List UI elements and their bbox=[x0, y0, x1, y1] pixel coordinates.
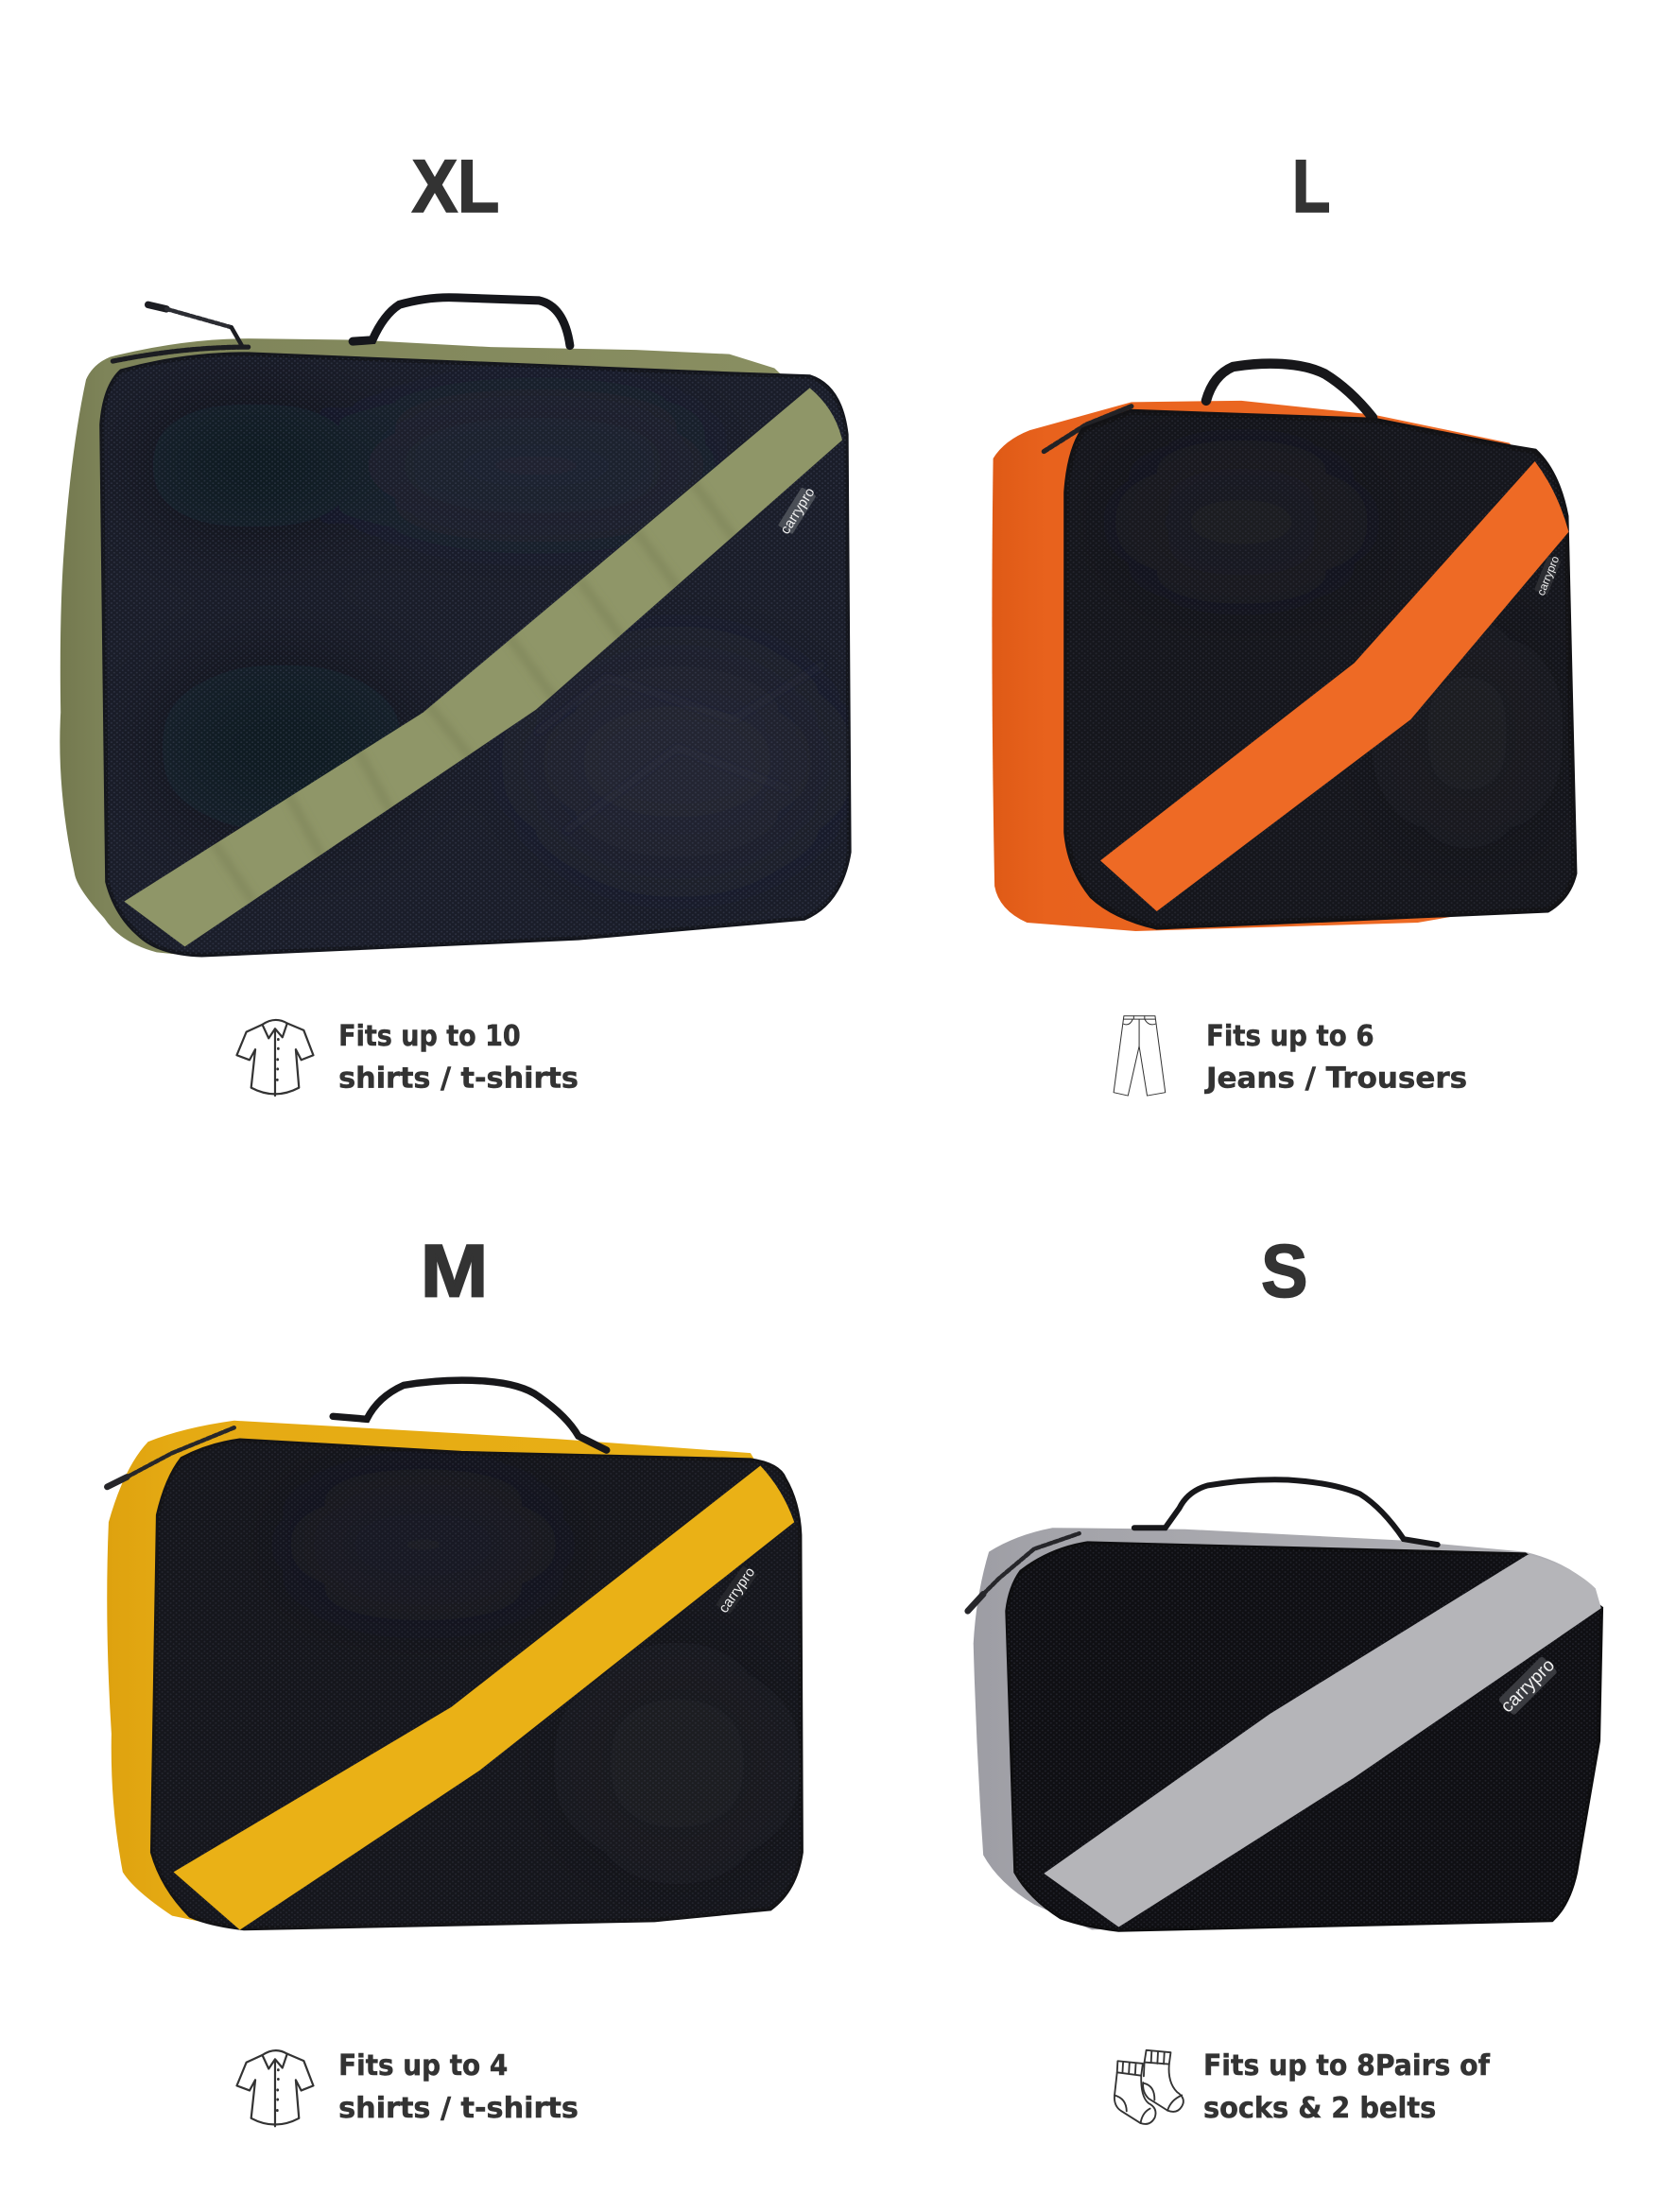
icon: socks bbox=[1115, 2050, 1184, 2124]
icon: shirt bbox=[237, 1020, 313, 1096]
text line 2: socks & 2 belts bbox=[1203, 2092, 1436, 2125]
mesh texture bbox=[1066, 412, 1574, 926]
zipper bbox=[1044, 406, 1132, 452]
zipper pull bbox=[112, 304, 249, 361]
brand tag: carrypro bbox=[777, 485, 818, 537]
olive bag body bbox=[60, 338, 832, 957]
brand tag: carrypro bbox=[716, 1564, 758, 1616]
bag: XL olive bbox=[60, 298, 849, 957]
capacity: L bbox=[1114, 1016, 1467, 1096]
mesh texture bbox=[152, 1441, 802, 1928]
text line 2: Jeans / Trousers bbox=[1204, 1063, 1467, 1096]
text line 1: Fits up to 6 bbox=[1206, 1020, 1374, 1053]
capacity: M bbox=[237, 2049, 579, 2126]
text line 1: Fits up to 8Pairs of bbox=[1203, 2049, 1491, 2082]
text line 1: Fits up to 4 bbox=[338, 2049, 508, 2082]
grey bag body bbox=[974, 1528, 1599, 1930]
mesh panel bbox=[1066, 412, 1574, 926]
zipper pull bbox=[107, 1427, 234, 1487]
band pleats bbox=[212, 479, 748, 903]
text line 1: Fits up to 10 bbox=[338, 1020, 521, 1053]
mesh panel bbox=[101, 354, 849, 955]
handle bbox=[333, 1380, 607, 1450]
heading: M: M bbox=[421, 1228, 488, 1312]
mesh panel bbox=[152, 1441, 802, 1928]
bag: S grey bbox=[968, 1479, 1601, 1930]
diagonal band bbox=[1100, 461, 1568, 911]
mesh panel bbox=[1008, 1544, 1601, 1930]
mesh shading bbox=[296, 1495, 776, 1862]
bag: L orange bbox=[992, 364, 1574, 931]
handle bbox=[1206, 364, 1373, 418]
icon: jeans bbox=[1114, 1016, 1166, 1096]
mesh shading bbox=[1129, 465, 1538, 832]
text line 2: shirts / t-shirts bbox=[338, 2092, 579, 2125]
mesh texture bbox=[101, 354, 849, 955]
diagonal band bbox=[1044, 1555, 1601, 1927]
mesh texture bbox=[1008, 1544, 1601, 1930]
icon: shirt bbox=[237, 2050, 313, 2126]
mesh shading bbox=[177, 397, 779, 817]
diagonal band bbox=[124, 388, 842, 946]
heading: XL: XL bbox=[412, 144, 499, 228]
handle bbox=[353, 298, 570, 346]
orange bag body bbox=[992, 401, 1538, 931]
diagonal band bbox=[174, 1466, 794, 1930]
handle bbox=[1134, 1479, 1438, 1545]
text line 2: shirts / t-shirts bbox=[338, 1063, 579, 1096]
brand tag: carrypro bbox=[1496, 1654, 1559, 1717]
capacity: S bbox=[1115, 2049, 1491, 2125]
yellow bag body bbox=[107, 1421, 776, 1930]
heading: L: L bbox=[1292, 144, 1330, 228]
zipper pull bbox=[968, 1533, 1080, 1611]
heading: S: S bbox=[1261, 1228, 1307, 1312]
bag: M yellow bbox=[107, 1380, 802, 1930]
brand tag: carrypro bbox=[1534, 554, 1562, 597]
capacity: XL bbox=[237, 1020, 579, 1096]
